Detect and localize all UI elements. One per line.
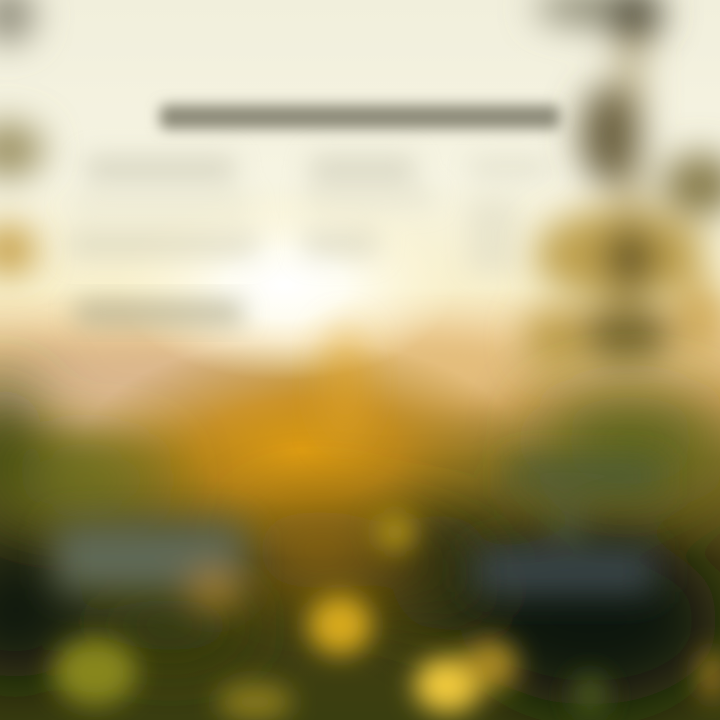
right tree silhouettes <box>523 0 720 370</box>
text column left, blurred <box>68 156 258 258</box>
golden glow over the treeline <box>80 340 520 560</box>
text column middle, blurred <box>303 156 435 258</box>
title bar, blurred <box>160 105 560 129</box>
sun <box>115 190 455 380</box>
lower right text card, blurred <box>475 464 660 592</box>
lower left dark foliage <box>0 380 250 680</box>
text column right, blurred <box>468 158 550 273</box>
vertical sun streak <box>321 325 369 445</box>
subheading, blurred <box>75 300 243 326</box>
lower left text card, blurred <box>55 525 245 612</box>
distant hills <box>0 338 520 427</box>
bokeh highlights <box>53 512 720 720</box>
lower right dark foliage <box>250 395 720 705</box>
left tree silhouettes <box>0 0 44 274</box>
